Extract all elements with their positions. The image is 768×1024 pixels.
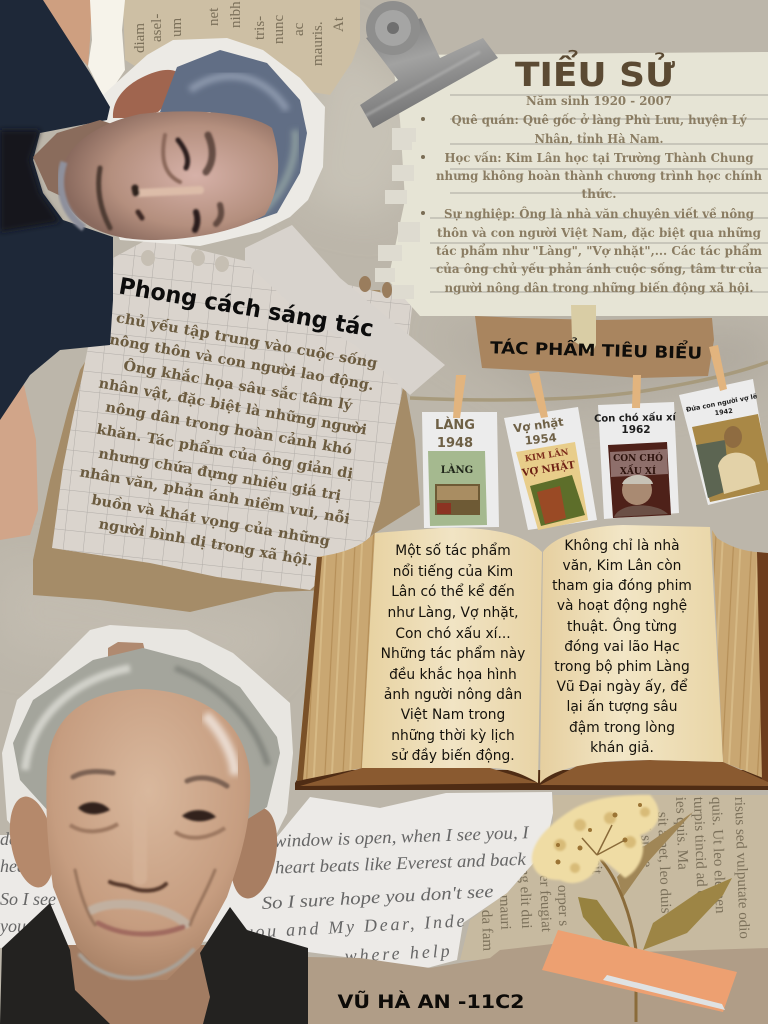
neck	[67, 945, 213, 1024]
newspaper scrap bottom right: sit	[588, 860, 605, 875]
book card: Làng 1948	[422, 375, 499, 528]
left page text: ảnh người nông dân	[384, 687, 522, 703]
hair	[13, 648, 280, 822]
cover: Làng: LÀNG	[441, 464, 473, 476]
biography text: thức.	[582, 187, 616, 201]
torn handwritten letter: So I see	[0, 889, 56, 909]
biography text	[421, 94, 762, 295]
book card: Con chó xấu xí 1962: 1962	[621, 424, 651, 436]
style body text: chủ yếu tập trung vào cuộc sống	[115, 308, 379, 372]
cover: Vợ nhặt: VỢ NHẶT	[520, 459, 577, 479]
right page text: trong bộ phim Làng	[554, 659, 690, 675]
left page	[362, 528, 542, 783]
left page text: Lân có thể kể đến	[391, 583, 515, 600]
panel: style note	[40, 225, 445, 600]
book base	[295, 770, 768, 790]
book card: Đứa con người vợ lẽ 1942	[679, 345, 768, 505]
torn white and peach scraps top left	[43, 0, 125, 100]
right page text: tham gia đóng phim	[552, 578, 692, 594]
torn handwritten letter: y heart beats like Everest and back	[259, 849, 527, 878]
torn newspaper top: mauris.	[310, 21, 326, 66]
biography text: Sự nghiệp: Ông là nhà văn chuyên viết về nông	[444, 205, 755, 221]
cover: Vợ nhặt	[516, 442, 588, 530]
book card: Đứa con người vợ lẽ 1942: Đứa con người vợ lẽ	[685, 392, 758, 414]
left page text: Những tác phẩm này	[381, 645, 525, 662]
newspaper scrap bottom right	[460, 795, 768, 960]
cover: Làng	[428, 451, 487, 526]
book card: Con chó xấu xí 1962	[594, 375, 679, 519]
right page text: lại ấn tượng sâu	[567, 699, 677, 715]
pressed flower	[532, 795, 737, 1022]
neck	[33, 120, 130, 205]
torn handwritten letter	[0, 792, 553, 968]
biography text: Học vấn: Kim Lân học tại Trường Thành Chung	[444, 150, 754, 165]
label: author name: VŨ HÀ AN -11C2	[338, 989, 524, 1013]
torn handwritten letter: you and My Dear, Inde	[242, 911, 465, 942]
style body text: khăn. Tác phẩm của ông giản dị	[95, 420, 354, 483]
book card: Vợ nhặt 1954: 1954	[524, 430, 557, 448]
left page text: nổi tiếng của Kim	[393, 563, 513, 580]
torn handwritten letter: So I sure hope you don't see	[261, 881, 494, 913]
nose and moustache	[75, 800, 215, 978]
torn handwritten letter: window is open, when I see you, I	[273, 822, 530, 851]
cover: Vợ nhặt: KIM LÂN	[524, 446, 569, 464]
heading: TIỂU SỬ: TIỂU SỬ	[515, 49, 675, 94]
book card: Vợ nhặt 1954	[504, 372, 597, 530]
newspaper scrap bottom right: da fam	[478, 910, 495, 952]
heading: Phong cách sáng tác: Phong cách sáng tác	[117, 274, 376, 343]
right page text: Vũ Đại ngày ấy, để	[556, 678, 688, 695]
clothespin	[632, 375, 641, 408]
newspaper scrap bottom right: ng elit dui	[516, 868, 534, 929]
newspaper scrap bottom right: mauri	[496, 895, 513, 930]
torn newspaper top: um	[169, 18, 185, 37]
ruled lines	[430, 95, 768, 292]
right page text: và hoạt động nghệ	[557, 598, 687, 614]
portrait bottom	[0, 625, 308, 1024]
torn newspaper top: tris-	[252, 16, 268, 40]
cover: Con chó xấu xí	[608, 442, 671, 518]
newspaper scrap bottom right: ies quis. Ma	[672, 797, 691, 870]
photo sticker outline	[90, 38, 325, 246]
blossoms	[532, 795, 659, 883]
navy jacket	[0, 0, 113, 420]
biography text: Quê quán: Quê gốc ở làng Phù Lưu, huyện Lý	[452, 112, 747, 127]
book card: Làng 1948: 1948	[437, 436, 473, 451]
clothespin	[709, 345, 727, 391]
upper leaf	[617, 812, 693, 897]
cover: Con chó xấu xí: CON CHÓ	[613, 452, 663, 464]
right page text: Không chỉ là nhà	[564, 538, 680, 554]
torn handwritten letter: where help	[344, 941, 450, 966]
notebook tabs	[375, 128, 420, 299]
book card: Làng 1948: LÀNG	[435, 417, 475, 433]
torn newspaper top: diam	[132, 23, 148, 53]
right page text: thuật. Ông từng	[567, 617, 677, 635]
right page text	[552, 538, 692, 756]
style body text: Ông khắc họa sâu sắc tâm lý	[122, 356, 355, 414]
grid paper sheet	[52, 238, 413, 590]
right page stack	[712, 530, 768, 780]
shirt	[0, 903, 308, 1024]
biography text: tác phẩm như "Làng", "Vợ nhặt",... Các tác phẩm	[436, 243, 762, 258]
left page text: Việt Nam trong	[401, 707, 505, 723]
torn peach scrap left	[0, 385, 38, 540]
clothespin	[453, 375, 466, 418]
book card: Con chó xấu xí 1962: Con chó xấu xí	[594, 410, 677, 425]
style body text	[78, 308, 379, 570]
left leaf	[578, 897, 630, 947]
style body text: nông thôn và con người lao động.	[108, 332, 375, 394]
newspaper scrap bottom right: orper s	[554, 885, 571, 927]
torn handwritten letter: you a	[0, 916, 40, 936]
torn newspaper top: nibh	[228, 1, 244, 28]
hair	[160, 50, 307, 230]
ears	[3, 793, 61, 891]
portrait top: rotated photo	[0, 0, 325, 420]
style body text: người bình dị trong xã hội.	[97, 515, 314, 570]
tape	[571, 305, 596, 353]
newspaper scrap bottom right: sit amet, leo duis	[654, 812, 674, 914]
style body text: buồn và khát vọng của những	[90, 491, 332, 550]
biography text: nhưng không hoàn thành chương trình học chính	[436, 169, 762, 183]
left page text: đều khắc họa hình	[389, 666, 517, 683]
photo sticker outline	[2, 625, 293, 860]
biography text: thôn và con người Việt Nam, đặc biệt qua những	[437, 226, 762, 240]
cover: Con chó xấu xí: XẤU XÍ	[620, 464, 656, 477]
left page text	[381, 542, 525, 764]
eyes and brows	[70, 772, 227, 838]
right leaf	[643, 878, 732, 950]
lower page edges	[300, 760, 768, 786]
left page text: sử đầy biến động.	[391, 747, 515, 764]
torn notebook sheet	[388, 52, 768, 316]
right page text: khán giả.	[590, 740, 654, 756]
peach fragment	[108, 642, 146, 660]
torn tape strip	[245, 225, 445, 395]
torn handwritten letter: heart	[0, 856, 39, 876]
stem	[597, 855, 636, 1022]
beard	[61, 162, 84, 228]
newspaper scrap bottom right: turpis tincid ad dui	[690, 797, 710, 910]
newspaper scrap bottom right: er feugiat	[536, 875, 554, 933]
torn newspaper top: At	[331, 16, 347, 32]
right page	[540, 525, 723, 783]
dark inner shirt	[0, 130, 60, 232]
book card: Vợ nhặt 1954: Vợ nhặt	[512, 415, 565, 435]
biography text: Nhân, tỉnh Hà Nam.	[534, 132, 664, 146]
left page text: Một số tác phẩm	[395, 542, 511, 559]
biography text: của ông chủ yếu phản ánh cuộc sống, tâm tư của	[436, 261, 762, 276]
torn newspaper top: ac	[291, 22, 307, 36]
torn newspaper top: asel-	[149, 14, 165, 42]
clothespin	[529, 372, 548, 418]
newspaper scrap bottom right: risus sed vulputate odio	[731, 797, 752, 939]
heading: TÁC PHẨM TIÊU BIỂU: TÁC PHẨM TIÊU BIỂU	[490, 335, 702, 363]
left page text: như Làng, Vợ nhặt,	[387, 605, 519, 621]
torn newspaper top: net	[206, 7, 222, 26]
rope	[410, 362, 768, 400]
left page stack	[297, 533, 375, 781]
left page text: những thời kỳ lịch	[391, 728, 515, 744]
binder holes	[141, 250, 229, 272]
kraft strip bottom	[308, 942, 768, 1024]
ear	[113, 70, 177, 118]
style body text: nông dân trong hoàn cảnh khó	[104, 398, 353, 459]
biography text: Năm sinh 1920 - 2007	[526, 94, 672, 108]
right page text: đóng vai lão Hạc	[564, 639, 680, 655]
facial details	[99, 135, 221, 230]
banner: kraft heading	[475, 305, 714, 378]
panel: open book	[295, 525, 768, 790]
right page text: đậm trong lòng	[569, 720, 675, 736]
book card: Đứa con người vợ lẽ 1942: 1942	[714, 407, 733, 417]
torn handwritten letter: dow	[0, 829, 30, 849]
orange tape	[542, 930, 737, 1012]
clip	[360, 1, 498, 128]
newspaper scrap bottom right: s. Et i sit ve	[636, 797, 654, 868]
face	[60, 111, 278, 240]
face	[46, 689, 250, 980]
style body text: nhưng chứa đựng nhiều giá trị	[97, 445, 342, 504]
right page text: văn, Kim Lân còn	[563, 558, 681, 574]
style body text: nhân vật, đặc biệt là những người	[97, 375, 368, 439]
cover: Đứa con người vợ lẽ	[692, 414, 768, 502]
torn newspaper top	[123, 0, 360, 95]
newspaper scrap bottom right: quis. Ut leo elemen	[708, 797, 728, 914]
kraft backing paper	[33, 290, 420, 612]
torn newspaper top: nunc	[271, 14, 287, 44]
style body text: nhân văn, phản ánh niềm vui, nỗi	[78, 462, 351, 528]
left page text: Con chó xấu xí...	[395, 626, 511, 642]
biography text: người nông dân trong những biến động xã hội.	[444, 280, 754, 295]
panel: biography note	[360, 1, 768, 316]
